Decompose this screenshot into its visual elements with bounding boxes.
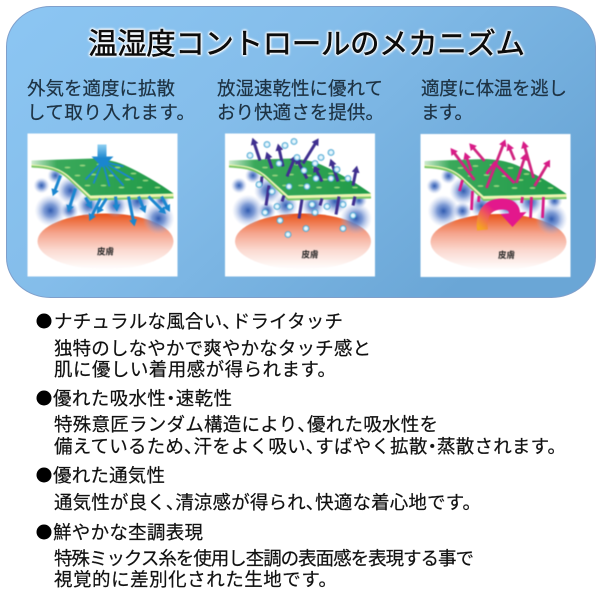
text block: natural texture and dry touch: 独特のしなやかで爽やかなタッチ感と	[54, 338, 371, 359]
text block: absorbency and quick drying: 特殊意匠ランダム構造により、優れた吸水性を	[54, 414, 438, 435]
text block: heat release description	[421, 78, 567, 123]
text block: natural texture and dry touch: 肌に優しい着用感が得られます。	[54, 359, 336, 380]
text block: intake description	[27, 78, 195, 123]
text block: heat release description: 適度に体温を逃し	[421, 78, 567, 99]
label: skin: 皮膚	[97, 246, 114, 256]
bullet	[36, 390, 52, 406]
water droplets	[247, 138, 356, 238]
text block: moisture release description: 放湿速乾性に優れて	[217, 78, 383, 99]
text block: intake description: 外気を適度に拡散	[27, 78, 175, 99]
text block: heathered appearance: 視覚的に差別化された生地です。	[54, 569, 337, 590]
text block: heathered appearance: 特殊ミックス糸を使用し杢調の表面感を表現する事で	[54, 548, 474, 569]
text block: moisture release description: おり快適さを提供。	[217, 102, 384, 123]
text block: natural texture and dry touch	[36, 311, 371, 380]
bullet	[36, 524, 52, 540]
diffusion lines on the fabric	[86, 162, 134, 186]
icon: curved heat arrow	[482, 204, 526, 230]
icon: large blue air arrow	[92, 144, 114, 168]
label: skin: 皮膚	[498, 250, 515, 260]
text block: heathered appearance	[36, 522, 474, 590]
text block: heat release description: ます。	[421, 102, 473, 123]
text block: natural texture and dry touch: ナチュラルな風合い、ドライタッチ	[54, 311, 343, 332]
diagram: moisture release through fabric	[225, 134, 375, 276]
text block: moisture release description	[217, 78, 384, 123]
text block: breathability	[36, 465, 481, 513]
text block: absorbency and quick drying: 優れた吸水性・速乾性	[53, 388, 232, 409]
diagram: body heat release	[420, 134, 570, 277]
blue arrows passing to the skin	[54, 176, 168, 222]
panel: mechanism background	[6, 6, 596, 298]
text block: heathered appearance: 鮮やかな杢調表現	[53, 522, 203, 543]
label: skin: 皮膚	[301, 250, 319, 260]
text block: absorbency and quick drying: 備えているため、汗をよく吸い、すばやく拡散・蒸散されます。	[54, 436, 566, 457]
text block: breathability: 優れた通気性	[53, 465, 165, 486]
text block: absorbency and quick drying	[36, 388, 566, 457]
purple arrows rising through the fabric	[254, 142, 356, 218]
title: 温湿度コントロールのメカニズム	[88, 28, 525, 61]
pink arrows rising through the fabric	[454, 144, 548, 218]
text block: breathability: 通気性が良く、清涼感が得られ、快適な着心地です。	[54, 492, 481, 513]
text block: intake description: して取り入れます。	[27, 102, 195, 123]
bullet	[36, 468, 52, 482]
bullet	[36, 314, 52, 328]
diagram: outside air diffusing through fabric	[28, 134, 178, 276]
